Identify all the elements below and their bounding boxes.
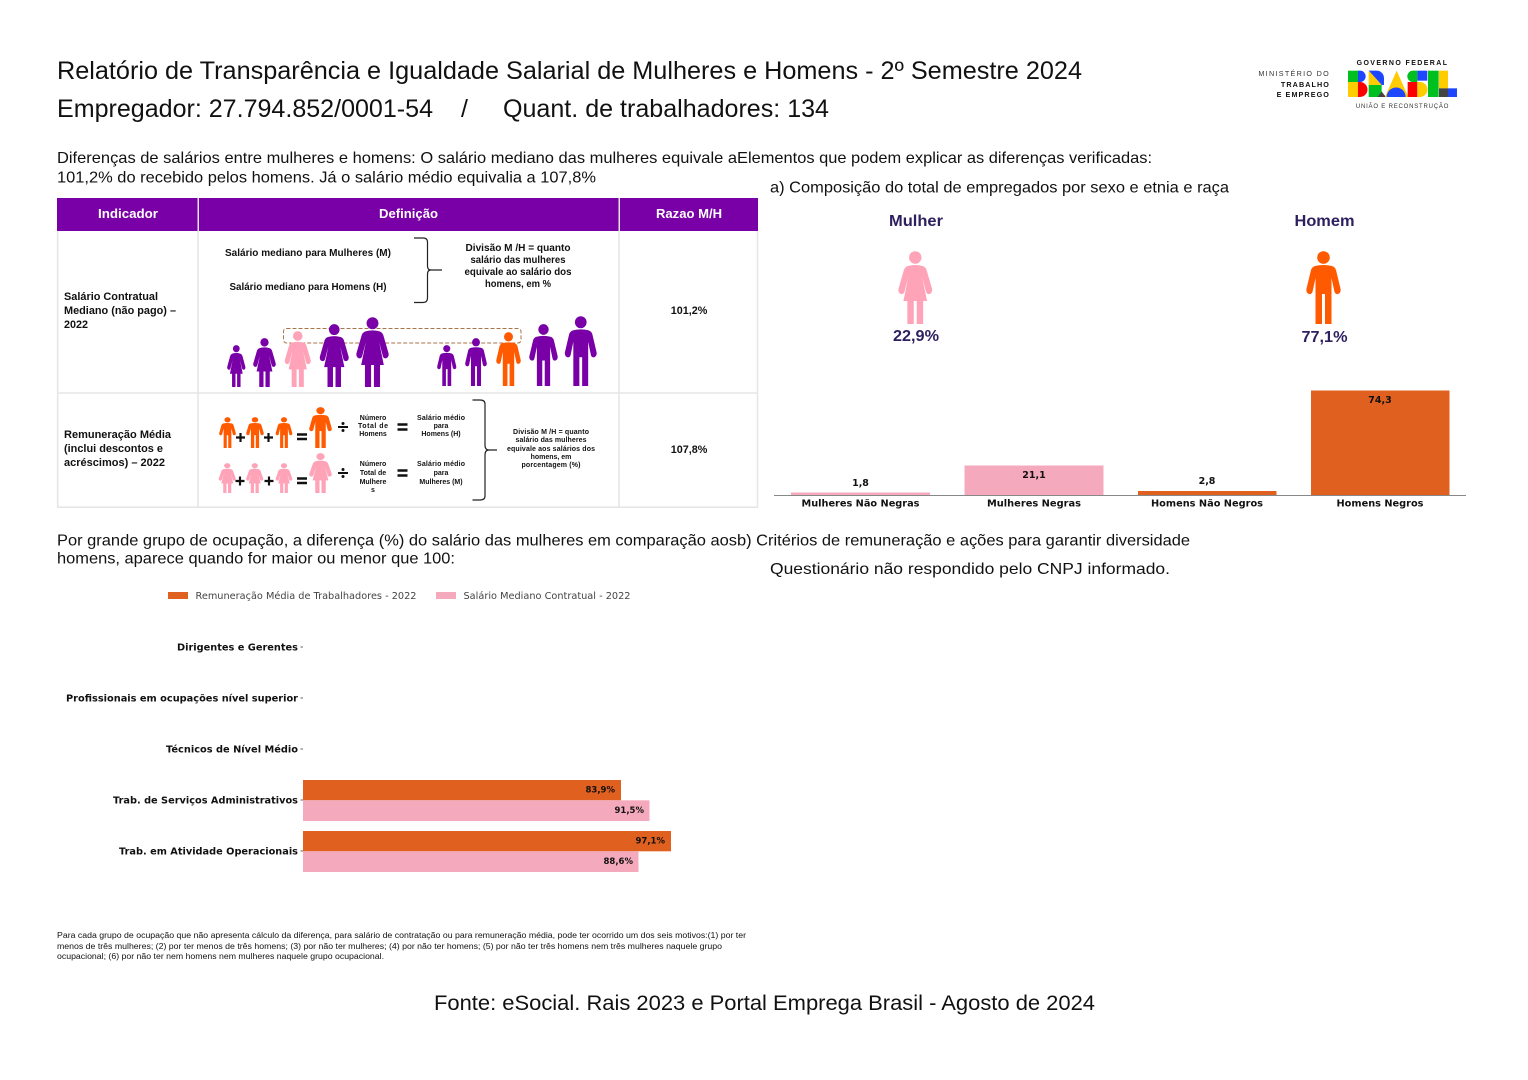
footnote	[57, 931, 746, 961]
formula: women average: Mulhere	[360, 479, 387, 486]
icons: men ordered by salary	[437, 316, 597, 386]
heading: composition of employees: a) Composição do total de empregados por sexo e etnia e raça	[770, 180, 1229, 196]
bar chart: composition by sex and race	[774, 390, 1466, 510]
value: average ratio: 107,8%	[671, 444, 708, 456]
subtitle: employer and number of workers	[57, 95, 829, 123]
average division explanation: equivale aos salários dos	[507, 446, 595, 453]
bar chart: composition by sex and race: Homens Negros	[1336, 498, 1424, 510]
bar chart: salary difference by occupation: 91,5%	[614, 806, 644, 816]
table header: Definição	[379, 206, 438, 221]
logo: ministry and federal government: UNIÃO E RECONSTRUÇÃO	[1356, 103, 1449, 110]
heading: remuneration criteria: b) Critérios de remuneração e ações para garantir diversidade	[737, 532, 1190, 550]
brace: average salaries	[472, 400, 497, 500]
formula: men average	[219, 407, 465, 448]
icons: women ordered by salary	[227, 317, 389, 387]
text: occupation group intro: Por grande grupo de ocupação, a diferença (%) do salário das mulheres em comparação aos	[57, 532, 737, 550]
chart legend	[168, 591, 630, 602]
brace: median salaries	[414, 238, 442, 302]
value: median ratio: 101,2%	[671, 305, 708, 317]
median division explanation: Divisão M /H = quanto	[466, 242, 570, 254]
footnote: menos de três mulheres; (2) por ter menos de três homens; (3) por não ter mulheres; (4) por não ter homens; (5) por não ter três homens nem três mulheres naquele grupo	[57, 942, 723, 951]
formula: men average: Homens (H)	[421, 431, 461, 438]
average division explanation: Divisão M /H = quanto	[513, 429, 589, 436]
formula: women average: para	[434, 470, 448, 477]
row label: average remuneration: acréscimos) – 2022	[64, 457, 165, 469]
formula: women average: Salário médio	[417, 461, 465, 468]
formula: women average	[219, 453, 465, 494]
subtitle: employer and number of workers: /	[461, 95, 468, 123]
formula: men average: Salário médio	[417, 415, 465, 422]
formula: women average: s	[371, 487, 375, 494]
average division explanation	[507, 429, 595, 469]
bar chart: salary difference by occupation: 97,1%	[636, 836, 665, 846]
panel: man share	[1294, 213, 1354, 346]
median salary labels: Salário mediano para Mulheres (M)	[225, 247, 391, 259]
table grid	[57, 231, 758, 507]
logo: ministry and federal government: MINISTÉRIO DO	[1258, 69, 1330, 78]
median division explanation	[464, 242, 572, 290]
bar chart: salary difference by occupation: Trab. de Serviços Administrativos	[113, 796, 298, 806]
bar chart: salary difference by occupation: Trab. em Atividade Operacionais	[119, 846, 298, 858]
bar chart: composition by sex and race: 1,8	[852, 478, 869, 489]
median division explanation: salário das mulheres	[470, 254, 566, 266]
subtitle: employer and number of workers: Quant. de trabalhadores: 134	[503, 95, 829, 123]
panel: indicator table	[57, 198, 758, 507]
logo: ministry and federal government: E EMPREGO	[1277, 90, 1330, 99]
bar chart: composition by sex and race: 21,1	[1022, 470, 1046, 481]
row label: average remuneration: Remuneração Média	[64, 429, 172, 441]
table header	[57, 198, 758, 231]
average division explanation: porcentagem (%)	[522, 462, 580, 469]
footnote: Para cada grupo de ocupação que não apresenta cálculo da diferença, para salário de contratação ou para remuneração média, pode ter ocorrido um dos seis motivos:(1) por ter	[57, 931, 746, 940]
formula: men average: Total de	[358, 423, 388, 430]
text: salary differences intro	[57, 150, 737, 186]
panel: man share: Homem	[1294, 213, 1354, 230]
formula: women average: Número	[360, 461, 386, 468]
row label: contractual median salary	[64, 291, 176, 331]
average division explanation: salário das mulheres	[516, 437, 587, 444]
text: occupation group intro	[57, 532, 737, 568]
row label: average remuneration	[64, 429, 172, 469]
panel: man share: 77,1%	[1302, 329, 1348, 346]
formula: women average: Total de	[360, 470, 386, 477]
formula: men average: Homens	[359, 431, 387, 438]
bar chart: salary difference by occupation	[66, 642, 671, 872]
median highlight dashed box	[284, 328, 521, 343]
title: Relatório de Transparência e Igualdade Salarial de Mulheres e Homens - 2º Semestre 2024	[57, 57, 1082, 85]
median division explanation: equivale ao salário dos	[464, 266, 572, 278]
footnote: ocupacional; (6) por não ter nem homens nem mulheres naquele grupo ocupacional.	[57, 952, 384, 961]
bar chart: salary difference by occupation: 83,9%	[586, 786, 615, 796]
logo: ministry and federal government	[1258, 60, 1457, 110]
bar chart: composition by sex and race: Mulheres Negras	[987, 498, 1081, 510]
panel: woman share: Mulher	[889, 213, 943, 230]
chart legend: Remuneração Média de Trabalhadores - 2022	[196, 591, 416, 602]
median salary labels	[225, 247, 391, 293]
panel: woman share	[889, 213, 943, 345]
text: salary differences intro: Diferenças de salários entre mulheres e homens: O salário mediano das mulheres equivale a	[57, 150, 737, 167]
formula: women average: Mulheres (M)	[419, 479, 463, 486]
row label: contractual median salary: Mediano (não pago) –	[64, 305, 176, 317]
formula: men average: Número	[360, 415, 386, 422]
logo: ministry and federal government: TRABALHO	[1281, 80, 1330, 89]
bar chart: composition by sex and race: Mulheres Não Negras	[802, 498, 920, 510]
table header: Indicador	[98, 206, 158, 221]
source: Fonte: eSocial. Rais 2023 e Portal Emprega Brasil - Agosto de 2024	[434, 992, 1095, 1015]
median salary labels: Salário mediano para Homens (H)	[230, 281, 386, 293]
subtitle: employer and number of workers: Empregador: 27.794.852/0001-54	[57, 95, 433, 123]
panel: woman share: 22,9%	[893, 328, 939, 345]
text: occupation group intro: homens, aparece quando for maior ou menor que 100:	[57, 550, 455, 568]
bar chart: salary difference by occupation: Profissionais em ocupações nível superior	[66, 694, 298, 704]
bar chart: salary difference by occupation: 88,6%	[604, 857, 633, 867]
row label: contractual median salary: Salário Contratual	[64, 291, 158, 303]
text: questionnaire not answered: Questionário não respondido pelo CNPJ informado.	[770, 561, 1170, 578]
bar chart: salary difference by occupation: Dirigentes e Gerentes	[177, 642, 298, 654]
bar chart: composition by sex and race: 2,8	[1199, 476, 1216, 487]
chart legend: Salário Mediano Contratual - 2022	[464, 591, 630, 602]
table header: Razao M/H	[656, 206, 722, 221]
row label: average remuneration: (inclui descontos e	[64, 443, 163, 455]
bar chart: composition by sex and race: 74,3	[1368, 395, 1392, 406]
median division explanation: homens, em %	[485, 278, 552, 290]
average division explanation: homens, em	[531, 454, 571, 461]
text: salary differences intro: 101,2% do recebido pelos homens. Já o salário médio equivalia a 107,8%	[57, 170, 596, 186]
bar chart: composition by sex and race: Homens Não Negros	[1151, 498, 1263, 510]
heading: explaining elements: Elementos que podem explicar as diferenças verificadas:	[737, 150, 1152, 167]
logo: ministry and federal government: GOVERNO FEDERAL	[1357, 60, 1448, 67]
formula: men average: para	[434, 423, 448, 430]
bar chart: salary difference by occupation: Técnicos de Nível Médio	[166, 744, 298, 756]
row label: contractual median salary: 2022	[64, 319, 88, 331]
